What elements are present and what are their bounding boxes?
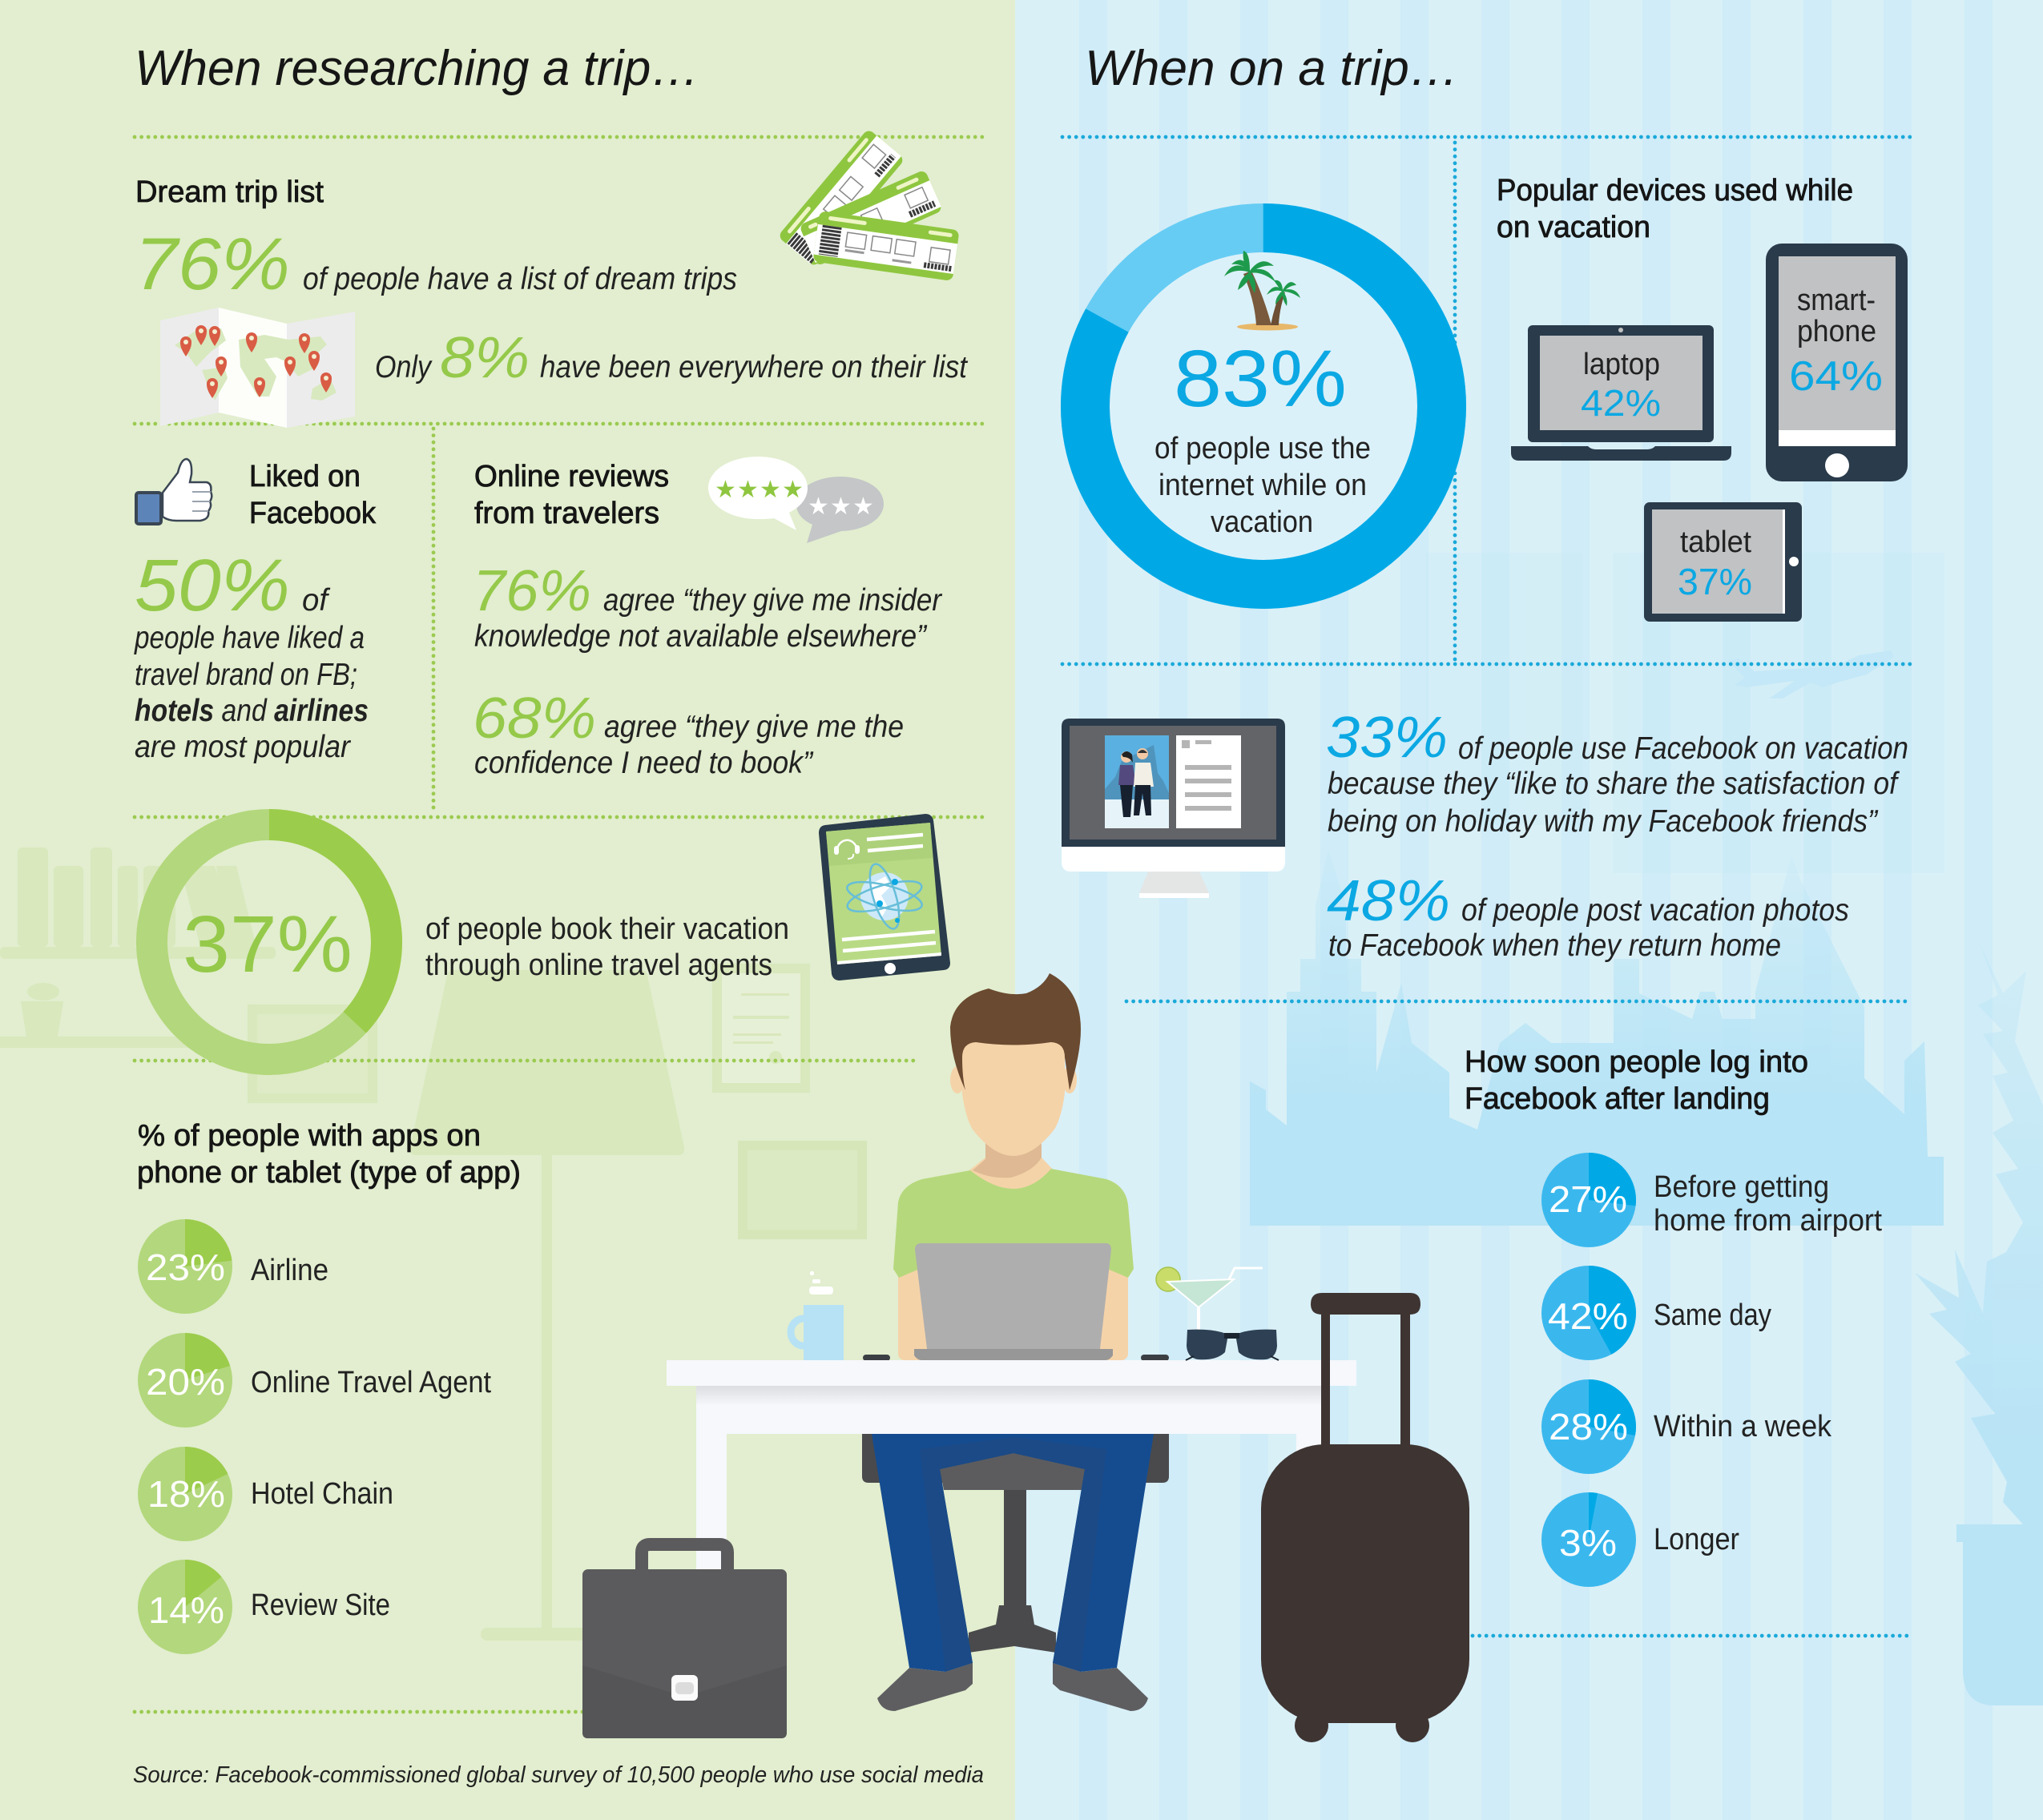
stat: 76 percent agree [473, 559, 943, 654]
heading: Dream trip list [135, 175, 324, 209]
pie: hotel chain [138, 1447, 393, 1541]
text: 48 percent post vacation photos [1327, 869, 1849, 963]
device: tablet [1644, 502, 1802, 622]
icon: rating speech bubbles: ★ [737, 476, 759, 504]
heading: How soon people log into [1465, 1045, 1808, 1079]
icon: computer monitor with facebook photo [1062, 719, 1285, 898]
icon: folded world map with pins [160, 308, 355, 428]
heading: % of people with apps on [138, 1119, 481, 1153]
ticket front [812, 211, 960, 281]
stat caption: internet while on [1159, 469, 1367, 502]
heading: Popular devices used while [1497, 174, 1853, 207]
pie: before getting home: home from airport [1654, 1204, 1882, 1238]
block: how soon people log into facebook [1465, 1045, 1882, 1587]
chart: 37 percent donut [152, 825, 386, 1059]
stat: 8 percent: 8% [440, 326, 530, 390]
trousers [872, 1434, 1154, 1672]
text: 33 percent use facebook on vacation: 33% [1326, 706, 1448, 770]
pie: within a week [1541, 1379, 1832, 1474]
pie: review site [138, 1560, 390, 1654]
stat: 68 percent agree: 68% [473, 687, 596, 751]
pie: airline: Airline [251, 1254, 328, 1287]
device: laptop: 42% [1581, 382, 1661, 424]
background decoration: faint building blocks [1426, 553, 1944, 873]
block: apps on phone or tablet [137, 1119, 521, 1654]
pie: airline [138, 1219, 328, 1314]
pie: before getting home [1541, 1153, 1882, 1247]
pie: before getting home: 27% [1549, 1178, 1627, 1220]
icon: rating speech bubbles: ★ [715, 476, 736, 504]
block: popular devices [1497, 174, 1908, 622]
pie: hotel chain: 18% [147, 1473, 225, 1515]
pie: same day: 42% [1548, 1295, 1628, 1337]
ticket middle [799, 169, 943, 267]
text: 48 percent post vacation photos: to Facebook when they return home [1328, 928, 1781, 963]
stat: 83 percent: 83% [1174, 334, 1347, 424]
source note: Source: Facebook-commissioned global survey of 10,500 people who use social media [133, 1762, 984, 1788]
sunglasses [1186, 1330, 1279, 1360]
stat caption: people have liked a [134, 621, 365, 655]
background decoration: potted plant [1915, 941, 2043, 1705]
pie: same day: Same day [1654, 1299, 1771, 1332]
block: popular devices: on vacation [1497, 211, 1650, 244]
stat: 76 percent: 76% [135, 223, 290, 305]
heading: when researching a trip: When researching a trip… [135, 41, 699, 96]
device: tablet: 37% [1678, 561, 1752, 602]
pie: review site: 14% [148, 1589, 224, 1631]
cocktail glass [1156, 1267, 1263, 1331]
background decoration: room shelves, books, lamp and frames [0, 848, 862, 1641]
stat caption: vacation [1211, 505, 1313, 539]
stat caption: of people have a list of dream trips [303, 262, 737, 296]
chart: 83 percent donut [1085, 228, 1442, 585]
text: book through online travel agents [425, 912, 789, 982]
coffee mug [791, 1271, 844, 1360]
heading: Online reviews [474, 460, 669, 493]
stat: 76 percent agree: agree “they give me insider [603, 583, 943, 618]
ticket back [777, 128, 905, 268]
pie: review site: Review Site [251, 1588, 390, 1622]
icon: plane tickets [777, 128, 960, 281]
icon: rating speech bubbles: ★ [852, 493, 874, 521]
stat: 50 percent: 50% [135, 545, 290, 626]
laptop [914, 1243, 1113, 1360]
device: smartphone: phone [1797, 315, 1876, 348]
device: smartphone: 64% [1789, 353, 1883, 400]
device: laptop [1511, 325, 1731, 461]
document [1176, 735, 1241, 828]
device: smartphone [1766, 244, 1908, 481]
pie: within a week: Within a week [1654, 1410, 1832, 1444]
device: tablet: tablet [1680, 525, 1751, 559]
stat caption [134, 583, 369, 764]
stat caption: of [302, 583, 331, 618]
text: book through online travel agents: of people book their vacation [425, 912, 789, 946]
pie: within a week: 28% [1549, 1406, 1628, 1448]
block: apps on phone or tablet: phone or tablet (type of app) [137, 1156, 521, 1190]
desk [667, 1360, 1356, 1570]
block: online reviews from travelers [473, 457, 943, 780]
pie: online travel agent [138, 1333, 491, 1427]
pie: airline: 23% [146, 1246, 225, 1288]
pie: longer [1541, 1492, 1739, 1587]
pie: online travel agent: 20% [146, 1361, 225, 1403]
icon: palm trees [1224, 251, 1300, 330]
stat: 68 percent agree: confidence I need to book” [474, 746, 814, 780]
stat caption: travel brand on FB; [135, 658, 357, 692]
shoes [877, 1663, 1148, 1711]
text: 33 percent use facebook on vacation: being on holiday with my Facebook friends” [1328, 804, 1879, 839]
section dividers: dotted lines [135, 137, 1912, 1712]
illustration: person at desk [667, 973, 1356, 1711]
text: 33 percent use facebook on vacation: of people use Facebook on vacation [1458, 731, 1908, 766]
stat: 76 percent agree: 76% [473, 559, 591, 623]
pie: longer: 3% [1559, 1522, 1617, 1564]
icon: rating speech bubbles: ★ [782, 476, 804, 504]
block: liked on facebook: Facebook [249, 497, 377, 530]
text: 33 percent use facebook on vacation: because they “like to share the satisfaction of [1328, 767, 1900, 801]
stat caption: of people use the [1154, 432, 1371, 465]
device: laptop: laptop [1583, 348, 1660, 381]
pie: before getting home: Before getting [1654, 1170, 1829, 1204]
stat: 68 percent agree: agree “they give me the [604, 710, 904, 744]
stat: 76 percent agree: knowledge not available elsewhere” [474, 619, 928, 654]
icon: thumbs up [136, 459, 212, 524]
text: 48 percent post vacation photos: of people post vacation photos [1461, 893, 1849, 928]
background decoration: city skyline [1250, 849, 1944, 1226]
device: smartphone: smart- [1797, 284, 1876, 317]
icon: tablet with travel agent app [819, 814, 950, 980]
chart: 37 percent donut: 37% [183, 900, 353, 989]
caption: only: Only [375, 350, 433, 385]
stat caption: are most popular [135, 730, 352, 764]
background decoration: airplane [1728, 650, 1894, 699]
pie: same day [1541, 1266, 1771, 1360]
icon: rolling suitcase [1261, 1293, 1469, 1742]
pie: hotel chain: Hotel Chain [251, 1477, 393, 1511]
stat caption: hotels and airlines [135, 694, 369, 728]
pie: online travel agent: Online Travel Agent [251, 1366, 491, 1399]
office chair [862, 1434, 1169, 1653]
text: 33 percent use facebook on vacation [1326, 706, 1908, 839]
icon: rating speech bubbles [708, 457, 884, 543]
text: 48 percent post vacation photos: 48% [1327, 869, 1450, 933]
pie: longer: Longer [1654, 1523, 1739, 1556]
icon: rating speech bubbles: ★ [760, 476, 781, 504]
photo of couple [1105, 735, 1169, 828]
stat caption: have been everywhere on their list [540, 350, 969, 385]
stat caption [1154, 432, 1371, 539]
block: how soon people log into facebook: Facebook after landing [1465, 1082, 1770, 1116]
block: liked on facebook [134, 459, 377, 764]
text: book through online travel agents: through online travel agents [425, 948, 772, 982]
icon: rating speech bubbles: ★ [830, 493, 852, 521]
heading: when on a trip: When on a trip… [1085, 41, 1459, 96]
block: online reviews from travelers: from travelers [474, 497, 659, 530]
stat: 68 percent agree [473, 687, 904, 780]
block: dream trip list [135, 175, 969, 390]
person torso and head [893, 973, 1134, 1360]
heading: Liked on [249, 460, 361, 493]
panel: left green background [0, 0, 1015, 1820]
icon: rating speech bubbles: ★ [808, 493, 829, 521]
icon: briefcase [582, 1544, 787, 1738]
panel: right striped blue background [1015, 0, 2043, 1820]
